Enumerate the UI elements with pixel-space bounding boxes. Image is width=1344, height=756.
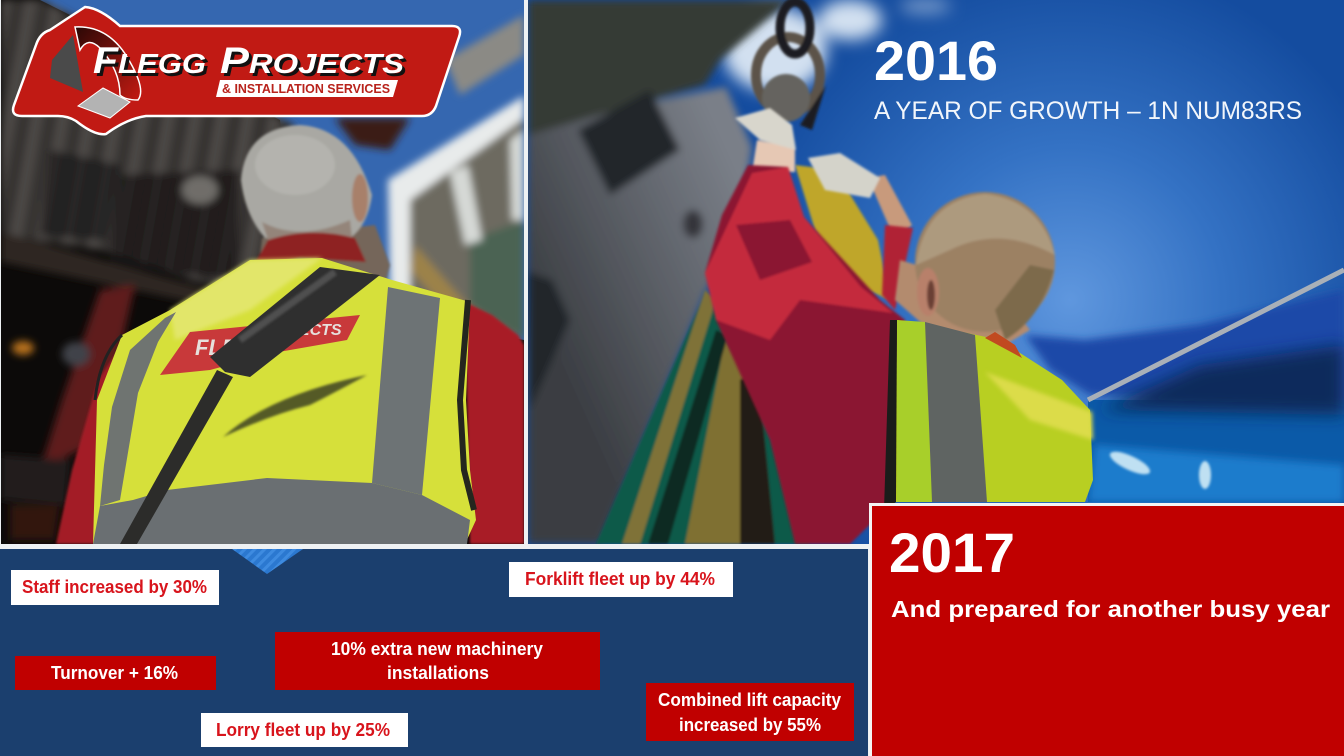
stat: lift capacity: increased by 55% — [679, 715, 821, 735]
logo wordmark: PROJECTS — [220, 40, 404, 81]
hi-vis vest — [884, 320, 1093, 510]
2017 heading: 2017 — [889, 521, 1015, 584]
stat: forklift fleet: Forklift fleet up by 44% — [525, 569, 715, 589]
hi-vis vest — [93, 258, 476, 544]
stat: machinery installations: 10% extra new machinery — [331, 639, 543, 659]
red jacket sleeves — [56, 302, 524, 544]
hi-vis vest: JECTS — [290, 322, 342, 339]
logo wordmark — [93, 40, 407, 84]
stat: forklift fleet — [509, 562, 733, 597]
worker head — [895, 192, 1055, 345]
stat: lorry fleet: Lorry fleet up by 25% — [216, 720, 390, 740]
crane hook — [756, 2, 826, 130]
red sleeve — [705, 165, 913, 544]
heading: 2016 — [874, 29, 1302, 125]
green lifting straps — [596, 290, 810, 544]
machine body — [528, 0, 790, 544]
heading: 2016: 2016 — [874, 29, 998, 92]
logo icon: excavator bucket — [50, 27, 141, 118]
stat: machinery installations — [275, 632, 600, 690]
stat: lift capacity — [646, 683, 854, 741]
worker head — [241, 125, 390, 285]
logo wordmark: PROJECTS — [223, 43, 407, 84]
stat: machinery installations: installations — [387, 663, 489, 683]
cloud — [723, 0, 951, 92]
left photo: worker seen from behind in hi-vis vest — [1, 0, 524, 544]
subheading: A YEAR OF GROWTH – 1N NUM83RS — [874, 97, 1302, 125]
stat: turnover — [15, 656, 216, 690]
company logo badge — [13, 7, 460, 134]
stat: staff — [11, 570, 219, 605]
logo tagline: & INSTALLATION SERVICES — [222, 82, 390, 96]
right photo: worker attaching sling to crane hook — [528, 0, 1344, 544]
2017 text: And prepared for another busy year — [891, 596, 1330, 622]
stat: turnover: Turnover + 16% — [51, 663, 178, 683]
blue tarpaulin and rod — [1025, 270, 1344, 502]
raised arms and gloves — [735, 108, 912, 240]
stat: lift capacity: Combined lift capacity — [658, 690, 841, 710]
striped triangle marker — [232, 549, 303, 574]
panel: 2016 statistics — [0, 549, 868, 756]
yellow sling — [795, 165, 890, 300]
stat: lorry fleet — [201, 713, 408, 747]
stat: staff: Staff increased by 30% — [22, 577, 207, 597]
logo wordmark: FLEGG — [93, 40, 206, 81]
hi-vis vest: FLE — [195, 335, 238, 360]
logo wordmark: FLEGG — [96, 43, 209, 84]
panel: 2017 — [870, 504, 1344, 756]
